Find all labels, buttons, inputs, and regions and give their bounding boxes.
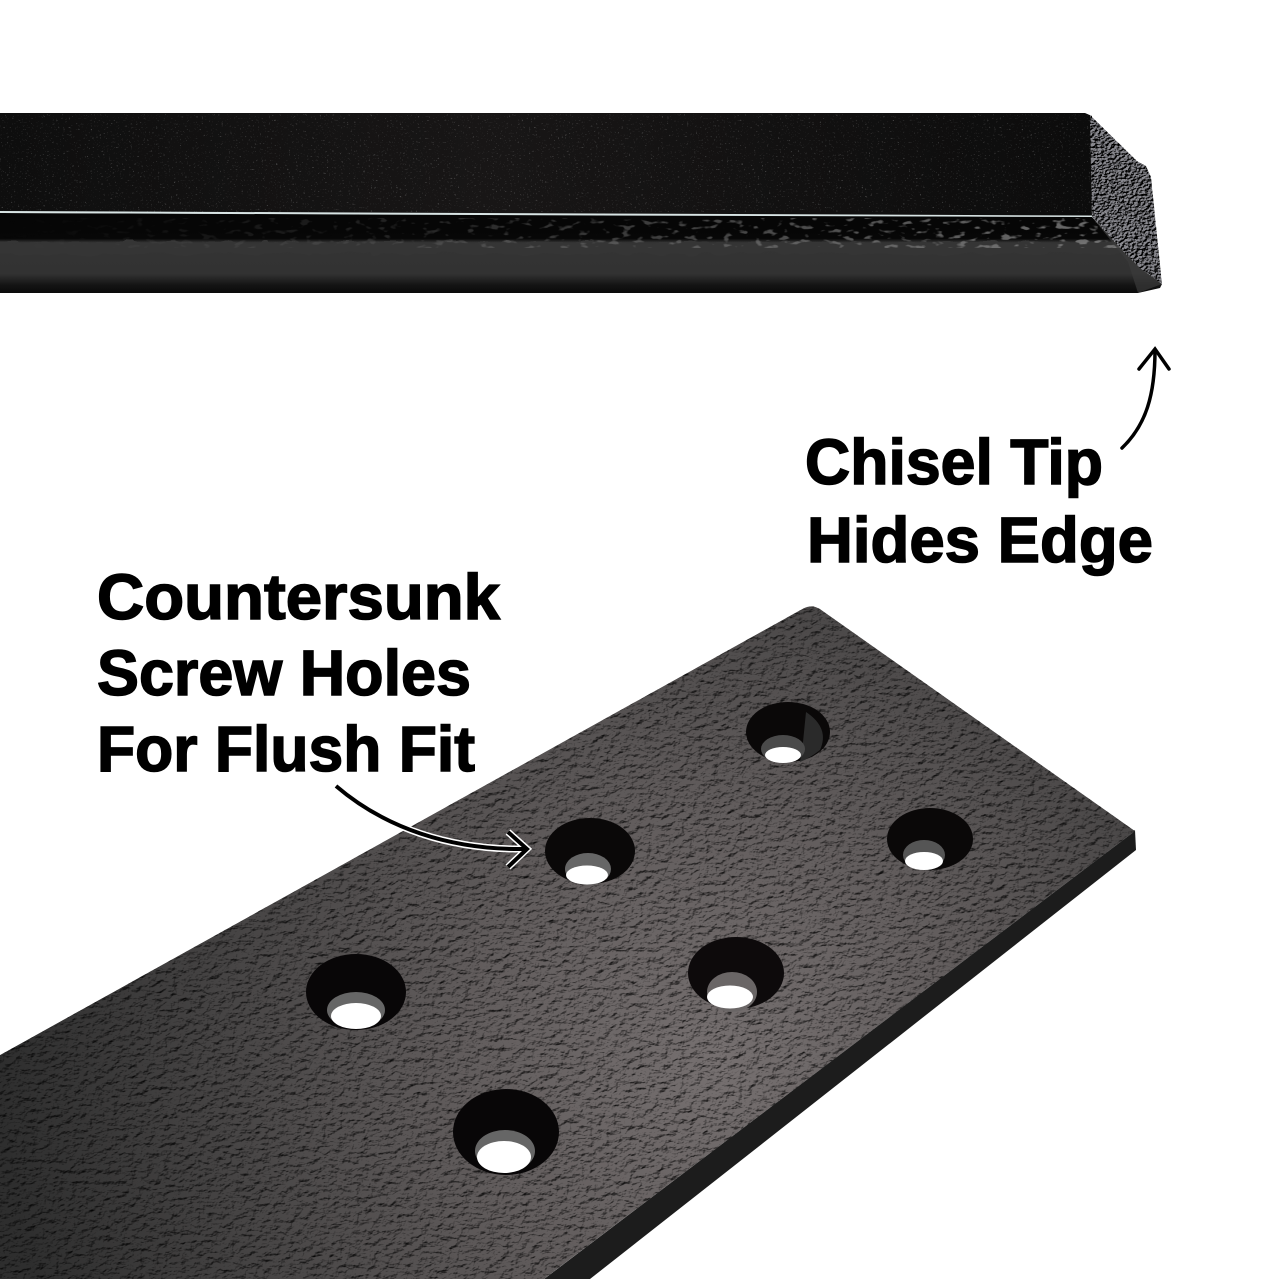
photo: chisel tip bar [0,113,1170,293]
arrow: to chisel tip [1122,349,1169,448]
countersunk hole 3 [545,818,635,885]
bar top face [0,113,1092,217]
countersunk hole 6 [453,1089,559,1175]
countersunk hole 2 [887,808,973,870]
heading: hides edge: Hides Edge [807,504,1153,576]
heading: screw holes: Screw Holes [97,637,471,709]
bar highlight edge [0,211,1092,217]
heading: countersunk: Countersunk [97,561,500,633]
plate textured face [0,606,1135,1279]
heading: for flush fit: For Flush Fit [97,713,475,785]
bar chisel tip [1090,115,1162,284]
countersunk hole 4 [688,937,784,1012]
heading: chisel tip: Chisel Tip [805,426,1103,498]
bar lower bevel [0,213,1170,293]
arrow: to screw hole [336,786,527,867]
callout: chisel tip [805,426,1153,576]
photo: countersunk mounting plate [0,606,1136,1279]
countersunk hole 5 [306,954,406,1030]
callout: countersunk screw holes [97,561,500,785]
plate side edge [544,830,1136,1279]
countersunk hole 1 [746,702,830,763]
